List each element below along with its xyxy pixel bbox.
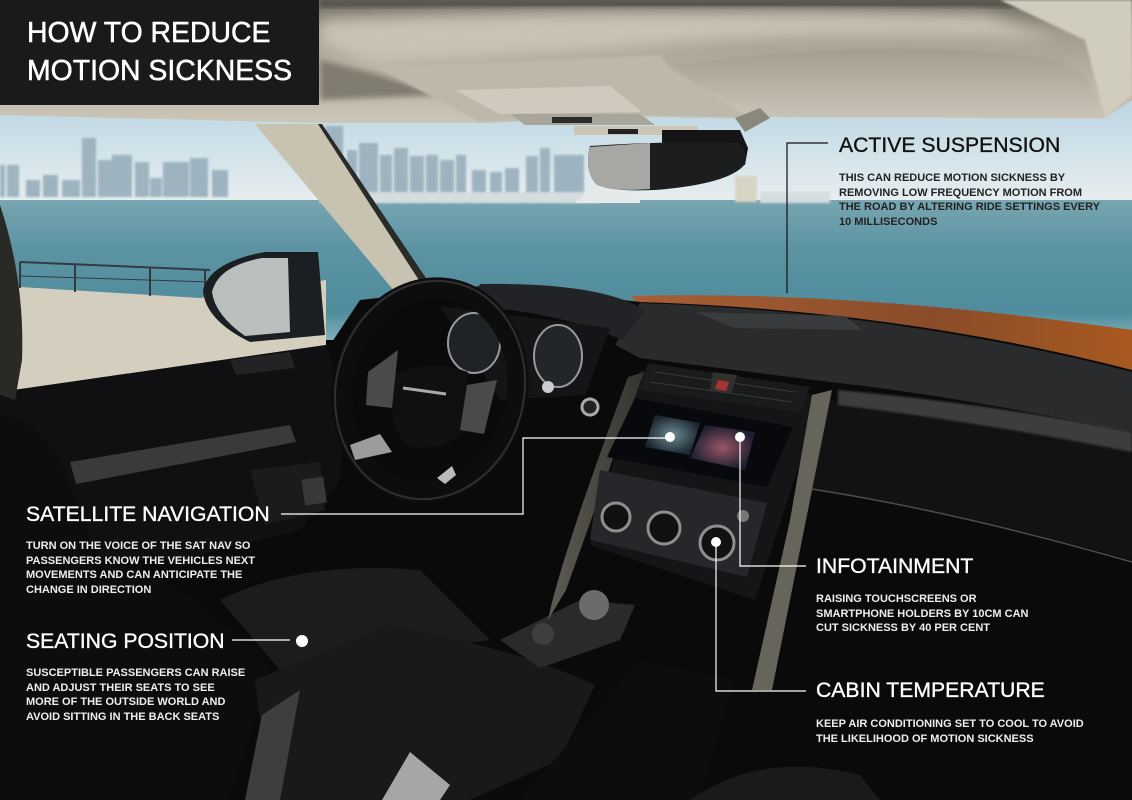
callout: active suspension: THIS CAN REDUCE MOTION SICKNESS BY xyxy=(839,172,1065,184)
overhead console xyxy=(378,55,750,122)
skyline xyxy=(0,126,584,203)
callout: cabin temperature: CABIN TEMPERATURE xyxy=(816,679,1045,702)
center console xyxy=(500,600,635,668)
roof headliner xyxy=(0,0,1132,123)
callout: infotainment: SMARTPHONE HOLDERS BY 10CM CAN xyxy=(816,608,1028,620)
callout: satellite navigation: SATELLITE NAVIGATION xyxy=(26,503,270,526)
callout: seating position: AND ADJUST THEIR SEATS TO SEE xyxy=(26,682,215,694)
callout: cabin temperature: THE LIKELIHOOD OF MOTION SICKNESS xyxy=(816,733,1034,745)
callout: seating position xyxy=(26,630,245,723)
title xyxy=(0,0,319,105)
steering wheel xyxy=(312,261,548,519)
callout: cabin temperature: KEEP AIR CONDITIONING SET TO COOL TO AVOID xyxy=(816,718,1084,730)
callout: active suspension: THE ROAD BY ALTERING RIDE SETTINGS EVERY xyxy=(839,201,1100,213)
callout: seating position: SEATING POSITION xyxy=(26,630,225,653)
instrument cluster xyxy=(440,306,610,400)
callout: seating position: AVOID SITTING IN THE BACK SEATS xyxy=(26,711,219,723)
callout: infotainment: CUT SICKNESS BY 40 PER CENT xyxy=(816,622,990,634)
side mirror xyxy=(203,252,325,342)
callout: satellite navigation xyxy=(26,503,270,596)
door panel xyxy=(0,345,345,560)
sea xyxy=(0,200,1132,340)
callout: satellite navigation: TURN ON THE VOICE OF THE SAT NAV SO xyxy=(26,540,250,552)
A-pillar xyxy=(255,124,428,292)
dashboard base xyxy=(0,285,1132,800)
callout: infotainment xyxy=(816,555,1028,634)
ground and railing xyxy=(0,280,326,392)
callout: satellite navigation: PASSENGERS KNOW THE VEHICLES NEXT xyxy=(26,555,255,567)
dash top xyxy=(615,303,1132,432)
climate panel xyxy=(590,470,767,577)
callout: satellite navigation: CHANGE IN DIRECTION xyxy=(26,584,151,596)
screen xyxy=(607,398,793,487)
title: MOTION SICKNESS xyxy=(27,55,292,87)
sun visor xyxy=(672,49,1104,118)
rear view mirror xyxy=(735,108,770,132)
front seat xyxy=(0,205,22,400)
callout: active suspension: REMOVING LOW FREQUENCY MOTION FROM xyxy=(839,187,1082,199)
callout: infotainment: RAISING TOUCHSCREENS OR xyxy=(816,593,977,605)
sky xyxy=(0,100,1132,205)
callout: active suspension xyxy=(838,134,1100,228)
callout: seating position: MORE OF THE OUTSIDE WORLD AND xyxy=(26,696,225,708)
bonnet xyxy=(631,295,1132,372)
title: HOW TO REDUCE xyxy=(27,17,270,49)
center stack xyxy=(590,370,822,600)
callout: active suspension: ACTIVE SUSPENSION xyxy=(839,134,1060,157)
callout: seating position: SUSCEPTIBLE PASSENGERS CAN RAISE xyxy=(26,667,245,679)
armrest xyxy=(255,625,595,800)
callout: infotainment: INFOTAINMENT xyxy=(816,555,973,578)
callout: active suspension: 10 MILLISECONDS xyxy=(839,216,937,228)
callout: cabin temperature xyxy=(816,679,1084,745)
callout: satellite navigation: MOVEMENTS AND CAN ANTICIPATE THE xyxy=(26,569,242,581)
callout leaders xyxy=(232,143,828,691)
